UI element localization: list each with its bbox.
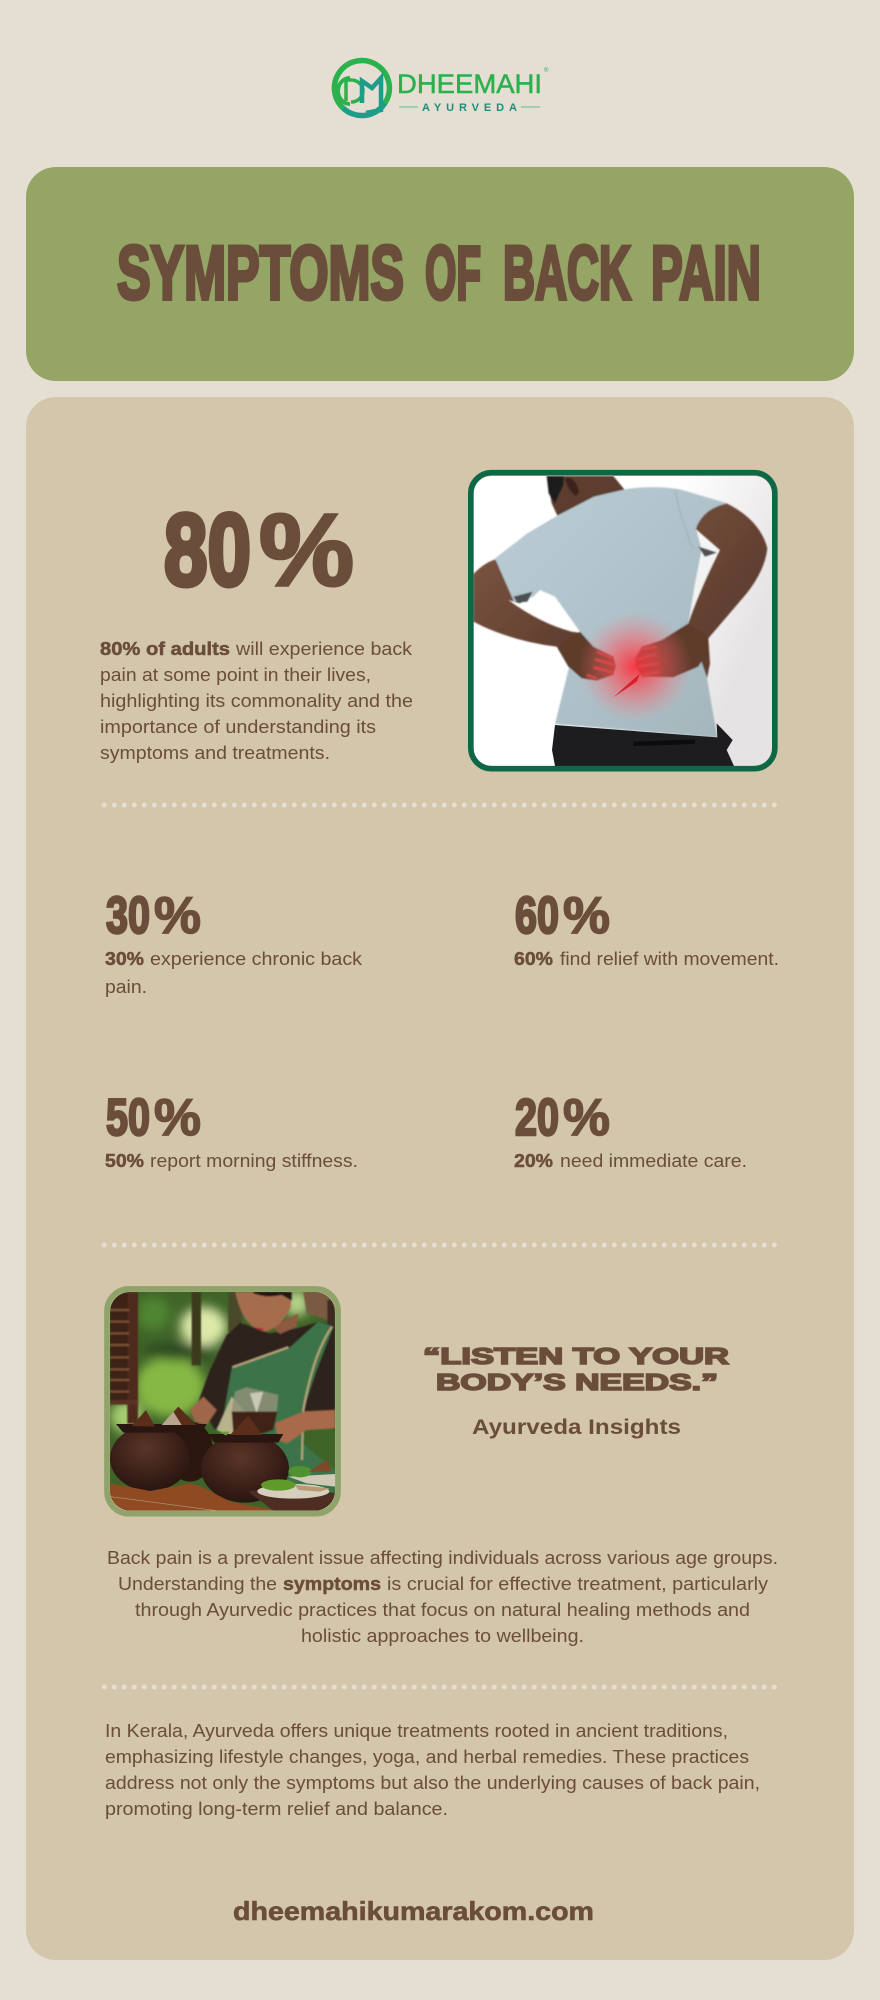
stat: 30%: pain.: [105, 976, 147, 997]
stat: 60%: [514, 887, 779, 969]
big stat: 80%: %: [259, 493, 354, 607]
stat: 50%: [105, 1089, 358, 1171]
number: %: [563, 887, 610, 945]
number: %: [154, 1089, 201, 1147]
description: find relief with movement.: [560, 948, 779, 969]
logo: Dheemahi Ayurveda: [334, 61, 549, 116]
number: %: [563, 1089, 610, 1147]
text block: 80% description: pain at some point in their lives,: [100, 664, 371, 685]
logo registered mark: ®: [544, 67, 549, 74]
pull quote: “LISTEN TO YOUR: [423, 1343, 730, 1369]
divider: [104, 802, 775, 808]
plates with herbs: [248, 1490, 335, 1510]
divider: [104, 1684, 775, 1690]
description: 20%: [514, 1150, 553, 1171]
text block: 80% description: [100, 638, 413, 763]
number: 20: [515, 1089, 559, 1147]
paragraph: back pain overview: symptoms: [283, 1573, 381, 1594]
description: report morning stiffness.: [150, 1150, 358, 1171]
hands: [560, 632, 616, 681]
quote attribution: Ayurveda Insights: [472, 1416, 681, 1439]
paragraph: Ayurveda in Kerala: [105, 1720, 760, 1819]
paragraph: Ayurveda in Kerala: emphasizing lifestyle changes, yoga, and herbal remedies. These practices: [105, 1746, 749, 1767]
title banner: [26, 167, 854, 381]
woman: face and neck: [272, 1313, 298, 1334]
title: BACK: [503, 231, 631, 316]
text block: 80% description: highlighting its commonality and the: [100, 690, 413, 711]
left arm: [473, 559, 617, 681]
right arm: [633, 503, 767, 680]
pull quote: [423, 1343, 730, 1395]
logo wordmark: DHEEMAHI: [397, 69, 542, 99]
description: need immediate care.: [560, 1150, 747, 1171]
shirt: [495, 487, 727, 737]
photo: Ayurveda practitioner with clay pots: [107, 1289, 338, 1514]
number: 30: [106, 887, 150, 945]
neck and head: [547, 476, 625, 516]
clay pots: [110, 1407, 289, 1503]
number: 50: [106, 1089, 150, 1147]
paragraph: back pain overview: Understanding the: [118, 1573, 277, 1594]
title: SYMPTOMS: [117, 231, 404, 316]
text block: 80% description: will experience back: [235, 638, 413, 659]
hands and jar: [190, 1397, 217, 1425]
photo: man holding lower back: [471, 473, 775, 769]
big stat: 80%: 80: [164, 493, 251, 607]
paragraph: back pain overview: [107, 1547, 778, 1646]
woman: top: [198, 1322, 335, 1430]
woman: sari: [223, 1322, 335, 1511]
paragraph: back pain overview: holistic approaches to wellbeing.: [301, 1625, 584, 1646]
text block: 80% description: importance of understanding its: [100, 716, 376, 737]
number: 60: [515, 887, 559, 945]
stat: 30%: [105, 887, 363, 997]
paragraph: Ayurveda in Kerala: In Kerala, Ayurveda offers unique treatments rooted in ancient traditions,: [105, 1720, 728, 1741]
website url: dheemahikumarakom.com: [233, 1896, 594, 1926]
icon: logo monogram: [334, 61, 389, 116]
trousers: [552, 723, 734, 766]
main content panel: [26, 397, 854, 1960]
title: PAIN: [651, 231, 761, 316]
number: %: [154, 887, 201, 945]
pull quote: BODY’S NEEDS.”: [436, 1369, 718, 1395]
text block: 80% description: symptoms and treatments.: [100, 742, 330, 763]
divider: [104, 1242, 775, 1248]
red pain glow: [582, 617, 688, 716]
paragraph: back pain overview: is crucial for effective treatment, particularly: [387, 1573, 769, 1594]
paragraph: back pain overview: Back pain is a prevalent issue affecting individuals across various age groups.: [107, 1547, 778, 1568]
table: [110, 1483, 277, 1511]
trunks and louvers: [192, 1292, 201, 1365]
stat: 20%: [514, 1089, 747, 1171]
description: 30%: [105, 948, 144, 969]
description: 50%: [105, 1150, 144, 1171]
paragraph: Ayurveda in Kerala: promoting long-term relief and balance.: [105, 1798, 448, 1819]
logo tagline: AYURVEDA: [422, 102, 517, 114]
description: 60%: [514, 948, 553, 969]
paragraph: Ayurveda in Kerala: address not only the symptoms but also the underlying causes of back pain,: [105, 1772, 760, 1793]
description: experience chronic back: [150, 948, 363, 969]
title: OF: [425, 231, 481, 316]
text block: 80% description: 80% of adults: [100, 638, 230, 659]
paragraph: back pain overview: through Ayurvedic practices that focus on natural healing methods and: [135, 1599, 750, 1620]
